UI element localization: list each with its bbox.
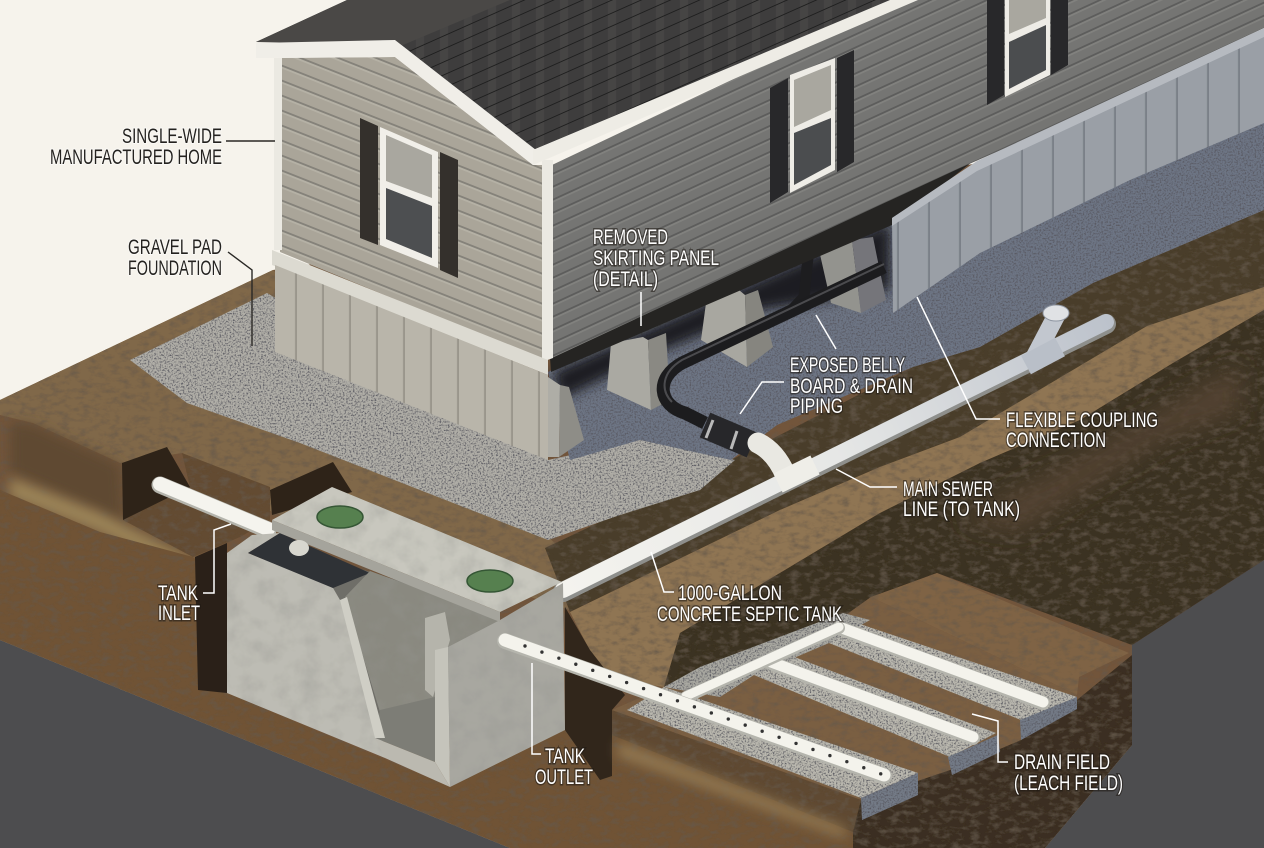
- tank right shadow: [565, 607, 625, 780]
- gable wall: [280, 57, 548, 362]
- lid slab: [272, 487, 562, 612]
- tan bank below sewer: [570, 287, 1264, 687]
- pier 3: [819, 237, 886, 313]
- front window 2: [987, 0, 1068, 105]
- label: main sewer line: LINE (TO TANK): [903, 498, 1020, 521]
- water table trim: [272, 250, 548, 375]
- label: flexible coupling: [917, 297, 1158, 452]
- label: tank inlet: INLET: [158, 602, 200, 625]
- pipe: header: [686, 627, 839, 697]
- label: tank outlet: TANK: [545, 745, 585, 768]
- open chamber: [248, 533, 370, 588]
- label: gravel pad foundation: GRAVEL PAD: [128, 236, 222, 259]
- concrete piers: [548, 237, 886, 457]
- label: flexible coupling: CONNECTION: [1006, 429, 1106, 452]
- pier 1: [607, 333, 670, 410]
- gravel strip middle: [754, 655, 996, 757]
- base plate lower left: [0, 640, 510, 848]
- wall edge: [435, 647, 450, 787]
- field front face top: [612, 710, 861, 832]
- label: drain field: (LEACH FIELD): [1014, 772, 1123, 795]
- baffle: [425, 612, 450, 697]
- gravel pad: [130, 122, 1264, 540]
- label: main sewer line: [836, 469, 1020, 521]
- label: removed skirting panel: (DETAIL): [593, 268, 658, 291]
- corner pier: [548, 377, 584, 457]
- access lid 2: [467, 570, 513, 592]
- main sewer line: [563, 316, 1106, 592]
- dark shelf along sewer: [545, 210, 1264, 612]
- soil top band left: [10, 422, 193, 557]
- tan band left: [10, 478, 193, 578]
- front wall: [552, 0, 1264, 358]
- label: exposed belly board: [740, 315, 913, 418]
- roof gable plane: [256, 0, 510, 45]
- label: single-wide manufactured home: SINGLE-WIDE: [122, 125, 222, 148]
- label: drain field: [972, 714, 1123, 795]
- slab edge: [272, 520, 500, 622]
- pier 2: [701, 290, 773, 367]
- left wall: [227, 533, 385, 758]
- underside belly: [550, 158, 977, 372]
- cleanout opening: [1043, 305, 1069, 321]
- floor: [375, 697, 435, 762]
- perforations: [525, 646, 884, 775]
- label: single-wide manufactured home: [50, 125, 275, 169]
- shadow under home: [553, 222, 890, 400]
- cleanout collar: [1026, 347, 1060, 365]
- white elbow: [758, 443, 786, 476]
- lit band on trench wall: [960, 365, 1240, 530]
- label: single-wide manufactured home: MANUFACTURED HOME: [50, 146, 222, 169]
- gravel under home: [548, 122, 1264, 460]
- right wall: [448, 583, 565, 787]
- label: concrete septic tank: 1000-GALLON: [678, 582, 782, 605]
- inlet trench: [122, 447, 352, 693]
- flexible coupling: [705, 425, 752, 445]
- label: tank inlet: [158, 524, 231, 625]
- inlet pipe: [160, 484, 268, 530]
- corner post: [542, 160, 553, 362]
- gravel header: [664, 613, 870, 697]
- label: removed skirting panel: REMOVED: [593, 226, 668, 249]
- tank backing: [250, 535, 500, 760]
- label: gravel pad foundation: FOUNDATION: [128, 257, 222, 280]
- cleanout tee: [1034, 316, 1056, 358]
- gravel strip back: [829, 623, 1077, 720]
- label: tank inlet: TANK: [158, 582, 198, 605]
- manufactured home: [256, 0, 1264, 460]
- drain field: [612, 573, 1132, 848]
- label: tank outlet: [532, 663, 593, 789]
- label: concrete septic tank: CONCRETE SEPTIC TANK: [657, 603, 842, 626]
- skirting cap: [892, 28, 1264, 226]
- eave fascia: [533, 0, 918, 165]
- gravel strip front: [627, 687, 918, 798]
- label: removed skirting panel: [593, 226, 719, 326]
- cut edge: [340, 597, 385, 738]
- drain piping: [663, 257, 884, 476]
- gable corner trim: [274, 58, 282, 250]
- access lid 1: [317, 506, 363, 528]
- label: exposed belly board: PIPING: [790, 395, 843, 418]
- tee collar: [778, 465, 815, 483]
- pipe: lateral middle: [771, 662, 973, 738]
- label: drain field: DRAIN FIELD: [1014, 751, 1110, 774]
- ground surface left: [0, 270, 570, 610]
- side skirting panel: [892, 30, 1264, 313]
- gravel ends: [861, 773, 918, 820]
- back mound: [871, 573, 1129, 695]
- pipe: lateral back: [839, 627, 1043, 703]
- dark trench wall: [664, 310, 1264, 687]
- label: exposed belly board: EXPOSED BELLY: [790, 354, 905, 377]
- inlet tee: [289, 540, 309, 556]
- septic tank: [227, 487, 565, 787]
- field bed: [612, 597, 1077, 800]
- label: flexible coupling: FLEXIBLE COUPLING: [1006, 409, 1158, 432]
- field dark right face: [853, 655, 1132, 848]
- black run: [663, 267, 884, 423]
- field front face tan stripe: [618, 742, 845, 838]
- interior back wall: [345, 571, 500, 712]
- gable skirting: [275, 265, 548, 460]
- front soil shade: [0, 490, 853, 848]
- front window 1: [770, 50, 854, 203]
- label: concrete septic tank: [651, 552, 842, 626]
- gable fascia: [256, 40, 536, 165]
- base plate lower right: [1045, 560, 1264, 848]
- gable window: [360, 118, 458, 278]
- label: removed skirting panel: SKIRTING PANEL: [593, 247, 719, 270]
- label: main sewer line: MAIN SEWER: [903, 478, 993, 501]
- label: exposed belly board: BOARD & DRAIN: [790, 375, 913, 398]
- label: gravel pad foundation: [128, 236, 252, 346]
- vertical drop: [789, 257, 808, 313]
- outlet pipe: [505, 640, 884, 776]
- floor edge: [375, 738, 450, 787]
- roof: [256, 0, 895, 150]
- label: tank outlet: OUTLET: [535, 766, 593, 789]
